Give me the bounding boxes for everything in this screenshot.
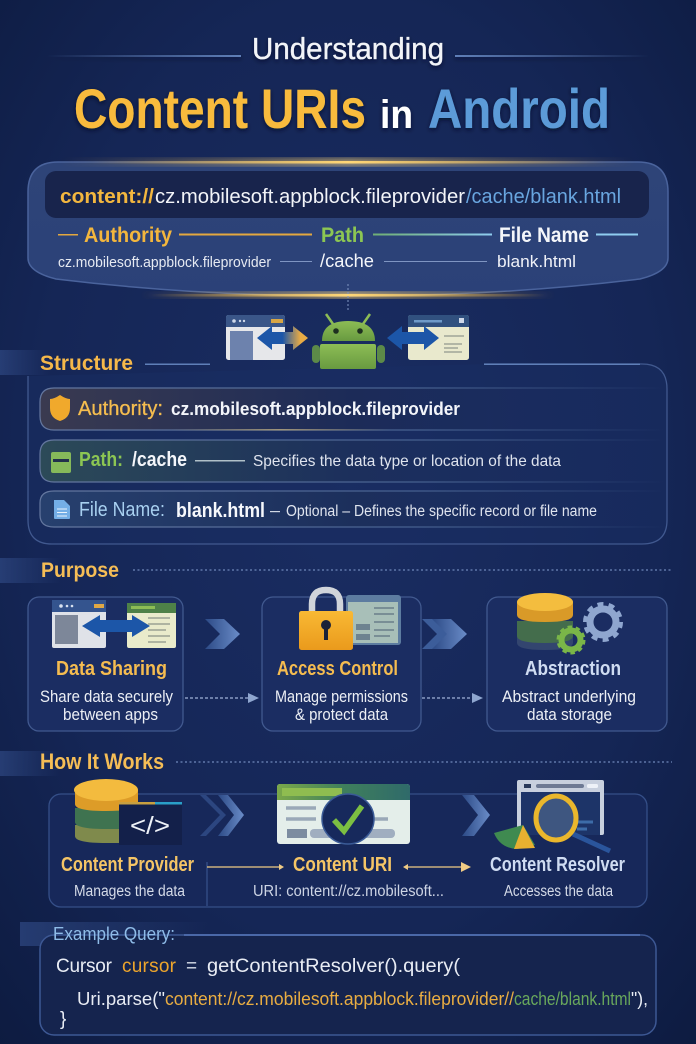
card: Access Control: & protect data xyxy=(295,706,389,724)
URI part labels xyxy=(58,224,638,247)
panel: structure xyxy=(28,364,667,544)
section heading: How It Works xyxy=(0,749,672,776)
section heading: Purpose xyxy=(0,558,672,583)
card: Data Sharing: Data Sharing xyxy=(56,658,167,680)
chevron xyxy=(200,795,244,836)
URI part values xyxy=(58,251,576,271)
code line 1: getContentResolver().query( xyxy=(207,956,461,977)
row: file name: File Name: xyxy=(79,499,165,521)
panel: example query xyxy=(20,922,656,1035)
row: file name: Optional – Defines the specific record or file name xyxy=(286,503,597,520)
chevron xyxy=(462,795,490,836)
left window xyxy=(226,315,285,360)
title: Understanding xyxy=(252,31,444,66)
card: Abstraction xyxy=(487,593,667,731)
row: path: Path: xyxy=(79,449,123,471)
panel: URI breakdown xyxy=(28,158,668,298)
icon: content provider: </> xyxy=(130,812,170,840)
section heading: Purpose: Purpose xyxy=(41,559,119,582)
chevron arrow 1 xyxy=(205,619,240,649)
dotted arrow 1 xyxy=(185,693,259,703)
icon: content provider xyxy=(74,779,182,845)
card: Abstraction: Abstract underlying xyxy=(502,688,636,706)
card: Data Sharing: between apps xyxy=(63,706,158,724)
URI part values: blank.html xyxy=(497,252,576,271)
code line 2: "), xyxy=(631,988,648,1009)
descriptions: Manages the data xyxy=(74,883,185,900)
section heading: Structure: Structure xyxy=(40,352,133,375)
code line 3: } xyxy=(60,1009,66,1030)
row: path: /cache xyxy=(132,449,187,471)
title: Content URIs xyxy=(74,77,366,140)
arrow: provider to URI xyxy=(207,864,284,870)
URI part labels: Path xyxy=(321,224,364,247)
arrow: URI to resolver xyxy=(403,862,471,872)
section heading: How It Works: How It Works xyxy=(40,749,164,774)
icon: document xyxy=(54,500,70,519)
URI part values: cz.mobilesoft.appblock.fileprovider xyxy=(58,255,271,271)
heading: Example Query: xyxy=(53,924,175,944)
icon: content URI xyxy=(277,784,410,844)
right window xyxy=(408,315,469,360)
labels: Content Provider xyxy=(61,854,194,876)
URI part labels: File Name xyxy=(499,224,589,247)
URI bar: cz.mobilesoft.appblock.fileprovider xyxy=(155,185,465,208)
title xyxy=(46,31,650,140)
icon: padlock xyxy=(299,590,401,650)
descriptions: Accesses the data xyxy=(504,883,613,900)
URI part labels: Authority xyxy=(84,224,172,247)
code line 2 xyxy=(77,988,648,1009)
descriptions: URI: content://cz.mobilesoft... xyxy=(253,883,444,900)
URI bar xyxy=(45,171,649,218)
card: Abstraction: data storage xyxy=(527,706,612,724)
icon: database and gears xyxy=(517,593,621,653)
URI bar: content:// xyxy=(60,185,154,208)
URI bar: /cache/blank.html xyxy=(466,185,621,208)
card: Access Control: Manage permissions xyxy=(275,688,408,706)
dotted arrow 2 xyxy=(422,693,483,703)
row: path: Specifies the data type or location of the data xyxy=(253,453,561,470)
row: authority: cz.mobilesoft.appblock.fileprovider xyxy=(171,398,460,419)
arrows xyxy=(257,326,308,350)
code line 1: cursor xyxy=(122,956,177,977)
URI part values: /cache xyxy=(320,251,374,271)
labels: Content Resolver xyxy=(490,854,625,876)
row: authority xyxy=(40,388,666,430)
row: file name xyxy=(40,491,666,527)
code line 2: content://cz.mobilesoft.appblock.fileprovider// xyxy=(165,988,515,1009)
icon: data sharing windows xyxy=(52,600,176,648)
android robot xyxy=(312,314,385,369)
icon: folder xyxy=(51,452,71,473)
section heading: Structure xyxy=(0,350,210,375)
code line 1: = xyxy=(186,956,197,977)
code line 1: Cursor xyxy=(56,956,113,977)
row: file name: blank.html xyxy=(176,500,265,522)
title: Android xyxy=(428,77,610,140)
card: Data Sharing xyxy=(28,597,183,731)
icon: shield xyxy=(50,395,70,421)
panel: how it works xyxy=(49,779,647,907)
code line 2: Uri.parse(" xyxy=(77,988,165,1009)
card: Data Sharing: Share data securely xyxy=(40,688,174,706)
card: Access Control xyxy=(262,590,421,731)
card: Access Control: Access Control xyxy=(277,658,398,680)
card: Abstraction: Abstraction xyxy=(525,658,621,680)
code line 2: cache/blank.html xyxy=(514,988,631,1009)
labels: Content URI xyxy=(293,854,392,876)
title: in xyxy=(380,93,413,137)
icon: content resolver xyxy=(494,780,610,851)
illustration: Android data exchange xyxy=(226,314,469,369)
row: authority: Authority: xyxy=(78,398,163,420)
row: path xyxy=(40,440,666,482)
chevron arrow 2 xyxy=(422,619,467,649)
code line 1 xyxy=(56,956,461,977)
